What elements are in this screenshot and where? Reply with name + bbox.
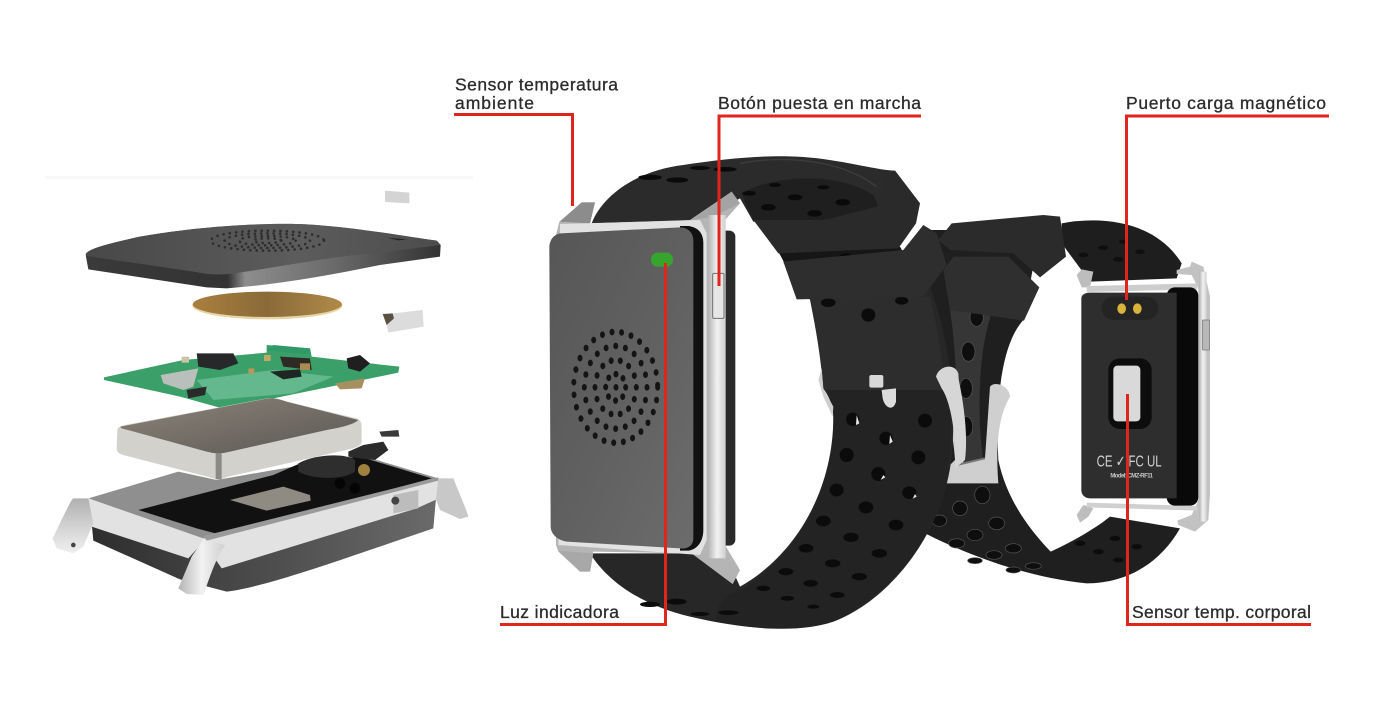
silver lugs and frame xyxy=(556,192,740,584)
back buckle xyxy=(936,367,1010,483)
battery xyxy=(117,398,362,479)
back view watch xyxy=(900,215,1210,583)
label: Luz indicadora xyxy=(500,263,666,624)
certification marks: CE ✓ FC UL xyxy=(1097,454,1162,471)
small sensor block xyxy=(385,191,409,203)
label: Luz indicadora: Luz indicadora xyxy=(500,602,619,622)
front face xyxy=(549,227,693,548)
front view watch xyxy=(549,156,966,629)
back strap loop and lower band xyxy=(900,230,1180,583)
faint top shadow band of exploded view xyxy=(45,176,473,179)
label: Sensor temp. corporal: Sensor temp. corporal xyxy=(1132,602,1311,622)
keepers xyxy=(753,171,947,299)
back silver lugs and frame xyxy=(1077,262,1210,532)
label: Sensor temperatura ambiente: ambiente xyxy=(455,93,534,113)
tray xyxy=(92,498,436,592)
label: Botón puesta en marcha xyxy=(718,93,921,286)
front strap top band xyxy=(592,156,920,223)
case frame with tray xyxy=(53,455,468,595)
side button xyxy=(713,273,724,318)
model text: Model: CMZ-RF11 xyxy=(1110,474,1154,480)
back strap top xyxy=(1062,220,1182,282)
front lower band xyxy=(590,287,953,629)
body temperature sensor xyxy=(1108,358,1152,429)
front black side xyxy=(680,226,703,551)
label: Puerto carga magnético: Puerto carga magnético xyxy=(1126,93,1326,113)
label: Sensor temp. corporal xyxy=(1128,394,1311,624)
label: Sensor temperatura ambiente xyxy=(454,74,618,206)
speaker holes xyxy=(574,332,658,443)
label: Sensor temperatura ambiente: Sensor temperatura xyxy=(455,74,618,94)
back keepers xyxy=(938,215,1066,321)
exploded view of device xyxy=(53,191,468,595)
small components xyxy=(348,430,399,460)
gold disc xyxy=(192,292,342,319)
interior xyxy=(88,455,438,538)
label: Puerto carga magnético xyxy=(1126,93,1329,300)
connector xyxy=(383,310,424,333)
silver band xyxy=(88,478,438,568)
top cover xyxy=(86,224,441,288)
case back shell xyxy=(717,231,735,546)
indicator light xyxy=(651,253,673,267)
label: Botón puesta en marcha: Botón puesta en marcha xyxy=(718,93,921,113)
right lug xyxy=(436,478,468,519)
circuit board xyxy=(104,345,399,409)
back body xyxy=(1081,287,1198,506)
left lug xyxy=(53,498,93,553)
front lug xyxy=(178,539,225,595)
buckle xyxy=(818,367,966,468)
charging port xyxy=(1102,297,1158,320)
